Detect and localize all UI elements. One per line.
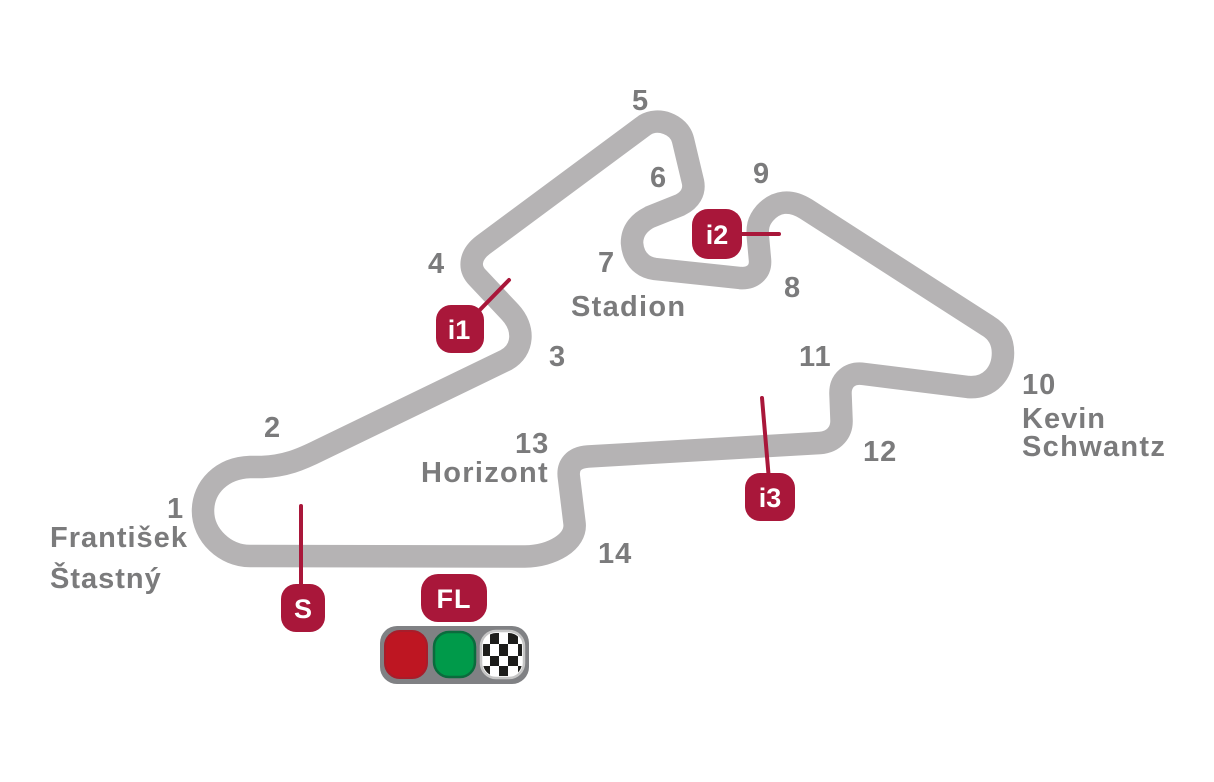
- icon: lights panel: [380, 626, 529, 684]
- label: turn 13 Horizont: Horizont: [421, 457, 549, 489]
- label: turn 7 Stadion: Stadion: [571, 291, 686, 323]
- label: turn 10 Kevin Schwantz: [1022, 369, 1166, 463]
- label: turn 7 Stadion: [571, 247, 686, 323]
- label: turn 2: 2: [264, 412, 281, 444]
- label: turn 5: 5: [632, 85, 649, 117]
- marker: FL: FL: [436, 584, 472, 614]
- label: turn 13 Horizont: [421, 428, 549, 489]
- marker: i3: [745, 398, 795, 521]
- marker: S: S: [294, 594, 312, 624]
- track: circuit outline: [203, 122, 1003, 556]
- label: turn 4: 4: [428, 248, 445, 280]
- icon: chequered flag: [481, 631, 524, 678]
- label: turn 13 Horizont: 13: [515, 428, 549, 460]
- marker: i1: i1: [448, 315, 470, 345]
- marker: S: [281, 506, 325, 632]
- icon: green light: [434, 632, 475, 677]
- marker: i2: i2: [706, 220, 728, 250]
- marker: FL: [421, 574, 487, 622]
- label: turn 7 Stadion: 7: [598, 247, 615, 279]
- label: turn 1 František Štastný: [50, 493, 188, 595]
- label: turn 6: 6: [650, 162, 667, 194]
- label: turn 10 Kevin Schwantz: Kevin: [1022, 403, 1106, 435]
- marker: i2: [692, 209, 779, 259]
- label: turn 11: 11: [799, 341, 832, 373]
- label: turn 14: 14: [598, 538, 632, 570]
- icon: red light: [385, 631, 427, 678]
- marker: i1: [436, 280, 509, 353]
- label: turn 1 František Štastný: 1: [167, 493, 184, 525]
- marker: i3: i3: [759, 483, 781, 513]
- label: turn 10 Kevin Schwantz: Schwantz: [1022, 431, 1166, 463]
- label: turn 8: 8: [784, 272, 801, 304]
- label: turn 1 František Štastný: František: [50, 522, 188, 554]
- label: turn 9: 9: [753, 158, 770, 190]
- label: turn 10 Kevin Schwantz: 10: [1022, 369, 1056, 401]
- label: turn 12: 12: [863, 436, 897, 468]
- label: turn 1 František Štastný: Štastný: [50, 561, 162, 595]
- label: turn 3: 3: [549, 341, 566, 373]
